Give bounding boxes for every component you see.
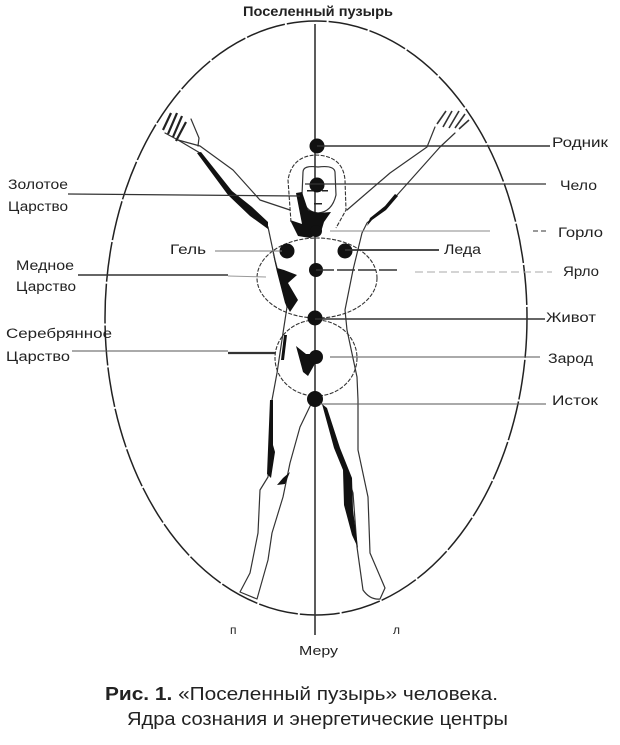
foot labels <box>230 623 400 658</box>
left labels: Царство <box>16 279 76 294</box>
right labels: Горло <box>558 225 603 240</box>
right labels: Родник <box>552 135 608 150</box>
aura: copper realm <box>257 238 377 318</box>
aura: silver realm <box>275 320 357 396</box>
central vertical axis <box>314 24 316 635</box>
right hand fingers <box>437 111 469 129</box>
right labels: Ярло <box>563 264 599 279</box>
right labels: Живот <box>546 310 596 325</box>
leader lines <box>68 146 552 404</box>
human body outline <box>165 119 455 599</box>
caption: Рис. 1. «Поселенный пузырь» человека. <box>105 684 498 704</box>
bubble ellipse <box>105 21 527 615</box>
foot labels: л <box>393 623 400 637</box>
right labels: Исток <box>552 393 598 408</box>
left labels <box>6 177 206 364</box>
left hand fingers <box>163 113 186 141</box>
caption: Ядра сознания и энергетические центры <box>127 709 508 729</box>
left labels: Медное <box>16 258 74 273</box>
left labels: Царство <box>6 349 70 364</box>
foot labels: п <box>230 623 236 637</box>
aura: golden realm <box>288 155 346 228</box>
caption <box>105 684 508 729</box>
black shadow shapes on the body <box>197 152 398 548</box>
left labels: Царство <box>8 199 68 214</box>
face details <box>307 190 328 204</box>
right labels <box>444 135 608 408</box>
left labels: Золотое <box>8 177 68 192</box>
energy centres <box>280 138 352 407</box>
right labels: Леда <box>444 242 482 257</box>
left labels: Серебрянное <box>6 326 112 341</box>
left labels: Гель <box>170 242 206 257</box>
right labels: Чело <box>560 178 597 193</box>
title label: Поселенный пузырь <box>243 3 393 19</box>
foot labels: Меру <box>299 643 339 658</box>
right labels: Зарод <box>548 351 593 366</box>
